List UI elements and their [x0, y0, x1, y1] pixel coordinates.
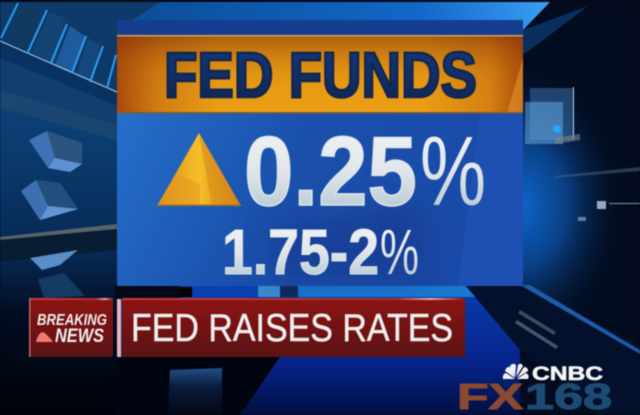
target range value: 1.75-2 — [222, 216, 379, 288]
headline bar — [117, 298, 465, 357]
headline text: FED RAISES RATES — [131, 307, 453, 350]
background: window strip — [0, 2, 160, 140]
panel right facet — [458, 113, 523, 286]
panel shading — [270, 205, 425, 280]
icon: red swoosh — [36, 332, 53, 342]
rate change value: 0.25 — [244, 116, 417, 226]
FX168 watermark — [457, 376, 612, 415]
target range value: % — [380, 216, 419, 288]
CNBC logo — [503, 364, 603, 385]
CNBC logo: CNBC — [532, 364, 603, 385]
panel header strip — [117, 20, 523, 36]
background: right wall — [465, 0, 640, 415]
icon: up triangle — [157, 133, 241, 206]
icons: floating cubes — [0, 131, 117, 298]
title: FED FUNDS — [164, 39, 477, 111]
orange title bar — [117, 35, 523, 114]
background: top band — [117, 0, 552, 30]
rate change value: % — [420, 116, 486, 226]
panel: Fed funds board — [117, 20, 523, 288]
breaking news badge — [29, 298, 113, 357]
breaking news badge: NEWS — [55, 326, 104, 347]
icon: peacock — [503, 364, 529, 379]
breaking news badge: BREAKING — [37, 312, 107, 329]
